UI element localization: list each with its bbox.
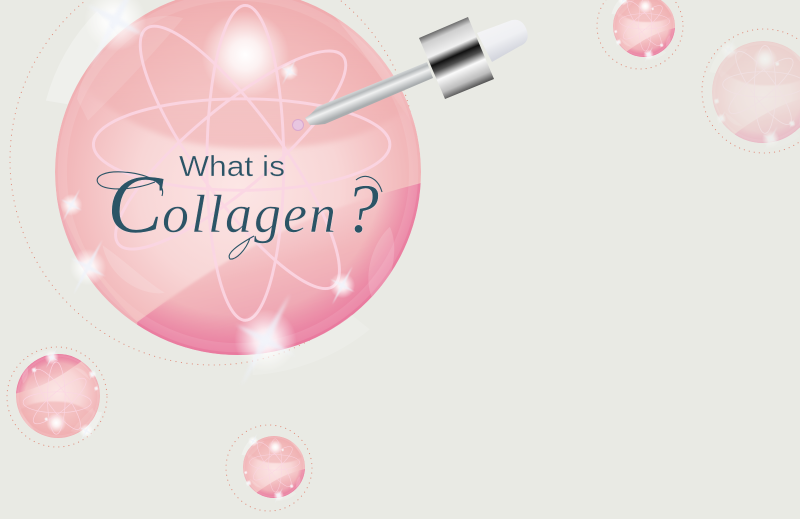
title line: Collagen?: ollagen <box>162 184 338 244</box>
metal cap <box>419 17 494 99</box>
title <box>97 151 382 259</box>
icon: serum dropper <box>292 17 528 130</box>
rubber bulb <box>477 20 528 62</box>
title line: Collagen?: C <box>107 158 164 251</box>
title line: What is: What is <box>179 151 285 183</box>
dropper glass tube <box>305 62 433 125</box>
title flourishes <box>97 172 382 259</box>
droplet <box>292 120 304 130</box>
small sphere: top right <box>597 0 683 69</box>
small sphere: bottom centre <box>226 425 312 511</box>
faded sphere: right edge <box>702 29 800 156</box>
sphere: large <box>37 0 439 403</box>
large collagen sphere <box>10 0 439 403</box>
dotted ring: large sphere <box>10 0 416 365</box>
title line: Collagen?: ? <box>344 171 379 248</box>
small sphere: lower left <box>7 343 107 447</box>
